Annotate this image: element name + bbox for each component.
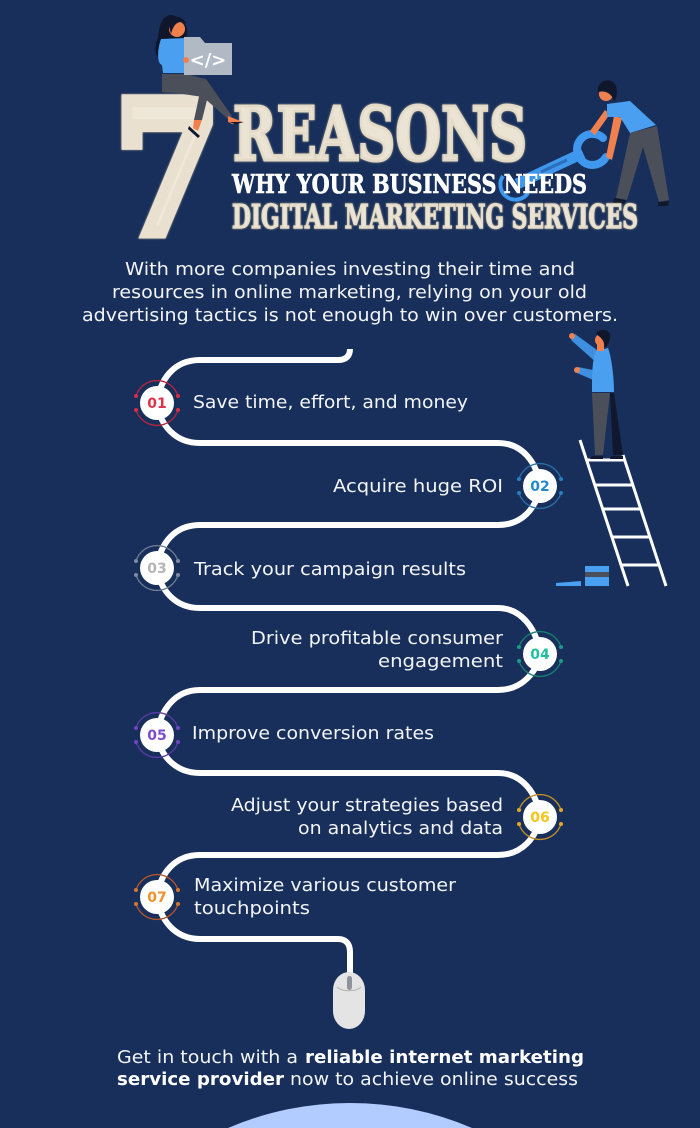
step 05 <box>134 713 434 757</box>
badge 03 <box>134 546 180 590</box>
illustration: seated woman with code folder <box>155 15 244 138</box>
badge 07 <box>134 875 180 919</box>
badge 06: 06 <box>530 810 550 826</box>
step 06 <box>231 795 563 839</box>
icon: folder: </> <box>190 50 226 71</box>
title: REASONS: REASONS <box>233 92 527 178</box>
intro paragraph <box>82 259 618 326</box>
badge 02 <box>517 464 563 508</box>
icon: ladder <box>580 440 666 586</box>
closing call to action: now to achieve online success <box>290 1069 578 1090</box>
step 07: Maximize various customer <box>194 875 457 896</box>
illustration: man on ladder <box>556 330 666 586</box>
step 06: Adjust your strategies based <box>231 795 503 816</box>
step 07 <box>134 875 457 919</box>
step 06: on analytics and data <box>298 818 503 839</box>
illustration: woman pushing wrench <box>500 80 669 206</box>
intro paragraph: With more companies investing their time and <box>125 259 575 280</box>
step 02 <box>333 464 563 508</box>
step 03: Track your campaign results <box>193 559 466 580</box>
badge 05 <box>134 713 180 757</box>
title: WHY YOUR BUSINESS NEEDS: WHY YOUR BUSINESS NEEDS <box>231 170 587 200</box>
badge 07: 07 <box>147 890 167 906</box>
badge 03: 03 <box>147 561 167 577</box>
closing call to action: Get in touch with a <box>117 1047 298 1068</box>
step 04: engagement <box>378 651 503 672</box>
title: big numeral 7: 7 <box>115 64 220 275</box>
step 05: Improve conversion rates <box>192 723 434 744</box>
step 01 <box>134 381 468 425</box>
step 02: Acquire huge ROI <box>333 476 503 497</box>
icon: boxes and wedge <box>556 566 609 586</box>
closing call to action <box>117 1047 584 1090</box>
step 04: Drive profitable consumer <box>251 628 504 649</box>
badge 02: 02 <box>530 479 550 495</box>
badge 01 <box>134 381 180 425</box>
icon: wrench <box>500 134 606 200</box>
icon: computer mouse <box>333 972 365 1029</box>
badge 05: 05 <box>147 728 167 744</box>
step 04 <box>251 628 563 676</box>
step 03 <box>134 546 466 590</box>
badge 04: 04 <box>530 647 550 663</box>
badge 04 <box>517 632 563 676</box>
badge 01: 01 <box>147 396 167 412</box>
step 07: touchpoints <box>194 898 310 919</box>
closing call to action: service provider <box>117 1069 284 1090</box>
intro paragraph: advertising tactics is not enough to win over customers. <box>82 305 618 326</box>
decorative bottom dome <box>228 1103 472 1128</box>
badge 06 <box>517 795 563 839</box>
closing call to action: reliable internet marketing <box>305 1047 584 1068</box>
intro paragraph: resources in online marketing, relying on your old <box>112 282 587 303</box>
step 01: Save time, effort, and money <box>193 392 468 413</box>
winding path connector <box>157 349 540 978</box>
